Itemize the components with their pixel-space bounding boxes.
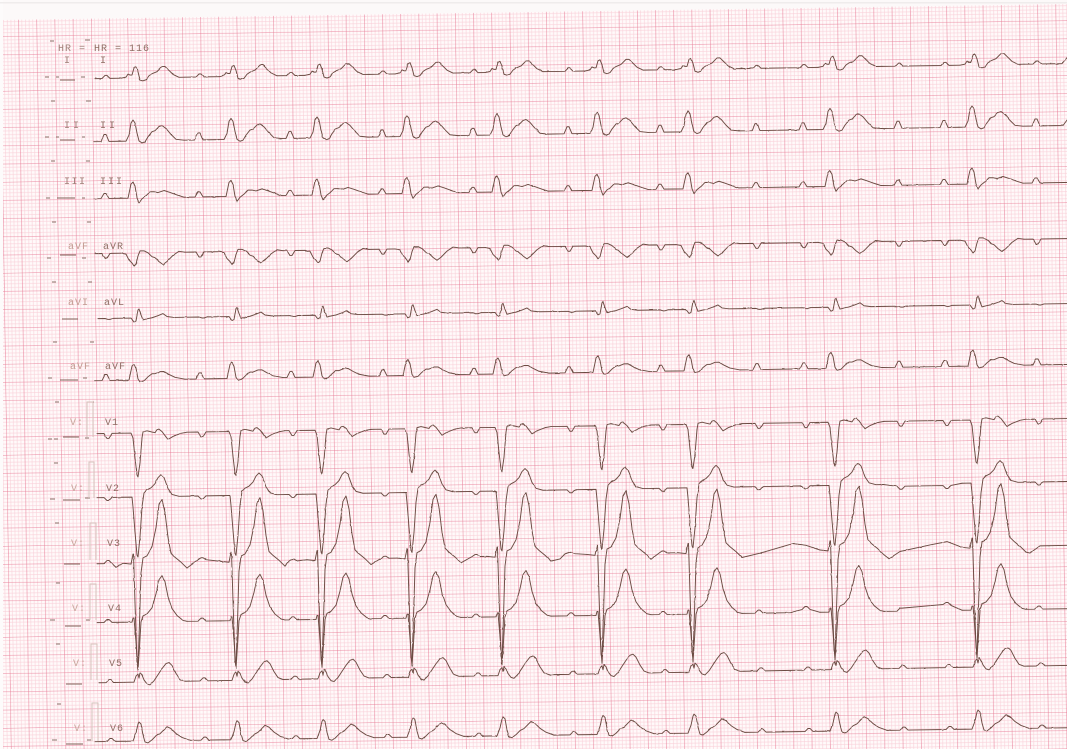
lead I label: I bbox=[100, 56, 107, 67]
calibration ticks bbox=[45, 40, 94, 740]
ghost labels bbox=[58, 44, 91, 735]
lead aVR label: aVR bbox=[103, 242, 124, 253]
ghost labels: aVI bbox=[68, 298, 89, 309]
trace: lead aVR bbox=[95, 236, 1067, 267]
lead labels bbox=[94, 44, 150, 735]
lead V1 label: V1 bbox=[105, 418, 119, 429]
lead V3 label: V3 bbox=[107, 539, 121, 550]
left paper margin bbox=[0, 0, 3, 749]
trace: lead V6 bbox=[95, 709, 1067, 744]
lead II label: II bbox=[100, 121, 118, 132]
lead aVL label: aVL bbox=[104, 298, 125, 309]
ghost labels: aVF bbox=[70, 362, 91, 373]
trace: lead III bbox=[94, 166, 1067, 204]
ghost labels: V: bbox=[74, 724, 88, 735]
lead III label: III bbox=[100, 177, 124, 188]
trace: lead aVL bbox=[98, 294, 1067, 323]
trace: lead V3 bbox=[97, 482, 1067, 669]
ghost labels: I bbox=[64, 56, 71, 67]
trace: lead V2 bbox=[97, 459, 1067, 558]
calibration pulses bbox=[87, 402, 98, 741]
lead V4 label: V4 bbox=[108, 604, 122, 615]
trace: lead II bbox=[94, 104, 1067, 144]
heart rate label: HR = 116 bbox=[94, 44, 150, 55]
ghost labels: HR = bbox=[58, 44, 86, 55]
ghost labels: III bbox=[64, 177, 87, 188]
ghost trace stubs bbox=[57, 80, 83, 744]
lead V6 label: V6 bbox=[110, 724, 124, 735]
trace: lead aVF bbox=[95, 348, 1067, 383]
ghost labels: V: bbox=[71, 484, 85, 495]
lead V5 label: V5 bbox=[109, 659, 123, 670]
ghost labels: V: bbox=[71, 539, 85, 550]
trace: lead V5 bbox=[99, 646, 1067, 686]
ghost labels: V: bbox=[73, 659, 87, 670]
ghost labels: aVF bbox=[68, 242, 89, 253]
trace: lead V1 bbox=[97, 415, 1067, 478]
ghost labels: V: bbox=[70, 418, 84, 429]
lead aVF label: aVF bbox=[105, 362, 126, 373]
lead V2 label: V2 bbox=[106, 484, 120, 495]
trace: lead I bbox=[95, 53, 1067, 82]
trace: lead V4 bbox=[97, 563, 1067, 671]
ghost labels: II bbox=[64, 121, 82, 132]
ghost labels: V: bbox=[72, 604, 86, 615]
truncated first print of lead labels and calibration marks bbox=[45, 40, 98, 744]
top paper shadow bbox=[0, 2, 1067, 4]
